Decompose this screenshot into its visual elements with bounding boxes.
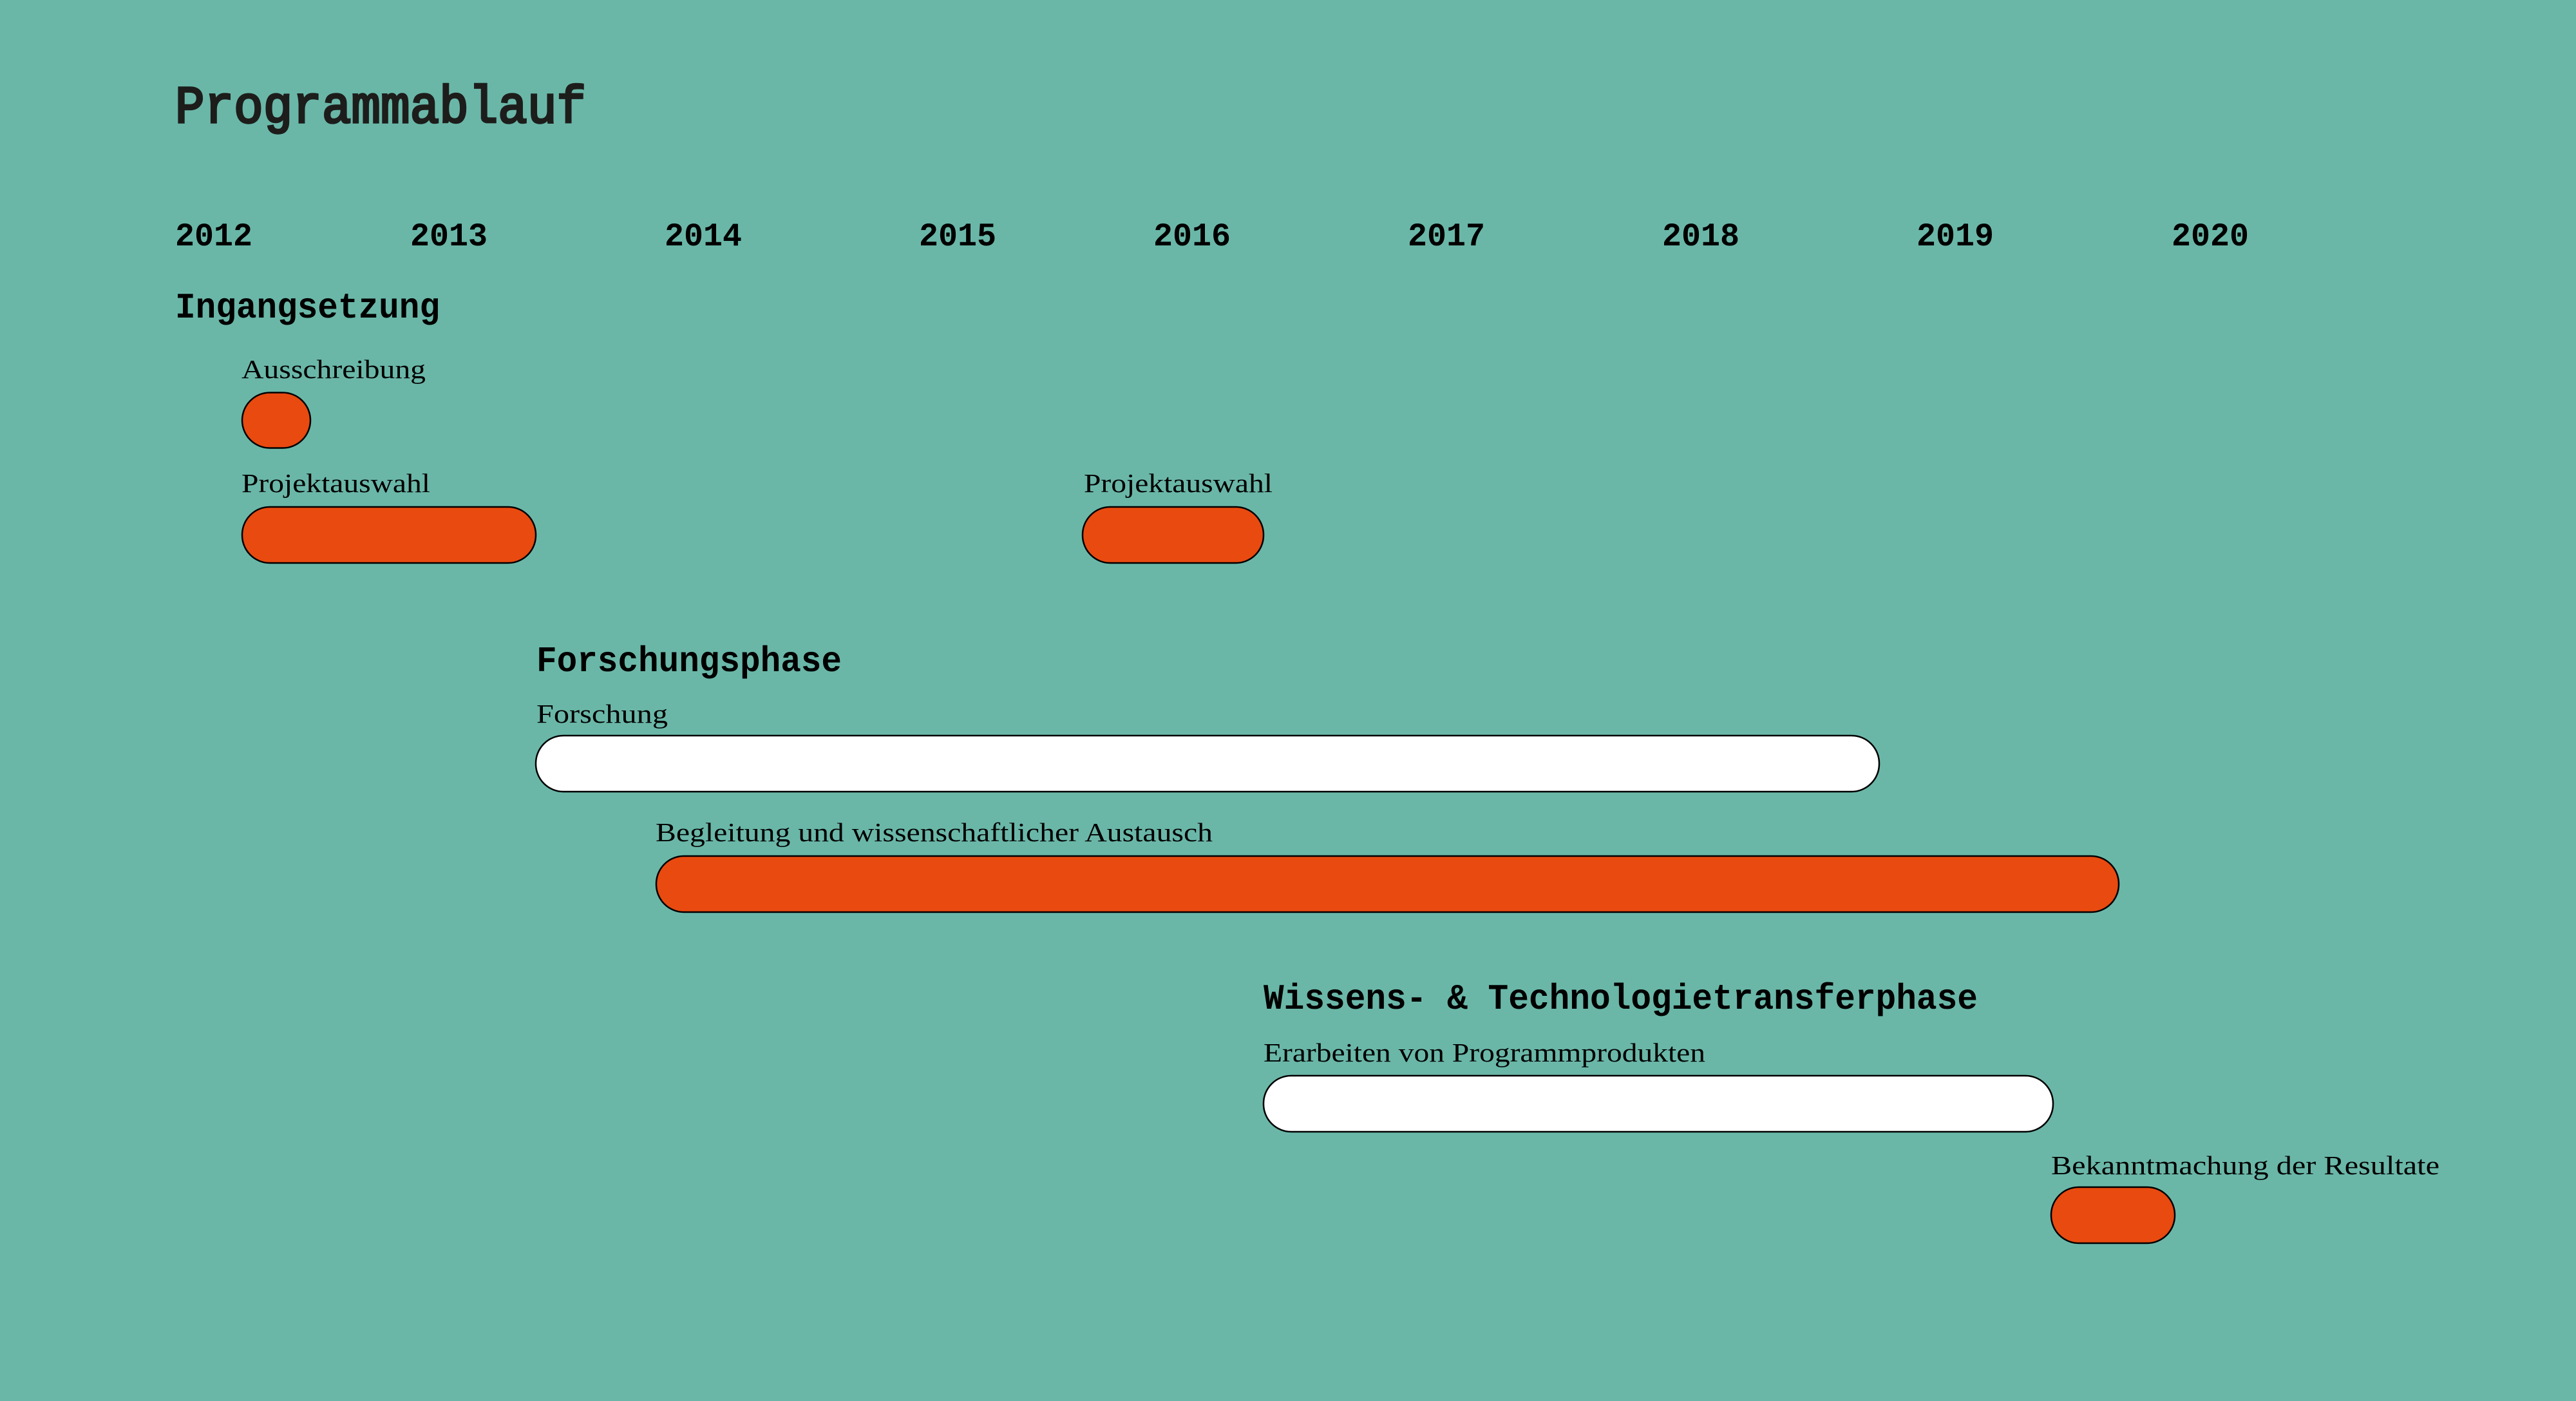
bar: Begleitung und wissenschaftlicher Austausch xyxy=(656,856,2119,912)
heading: Ingangsetzung: Ingangsetzung xyxy=(175,287,440,329)
heading: Wissens- & Technologietransferphase: Wissens- & Technologietransferphase xyxy=(1264,978,1978,1020)
year 2018: 2018 xyxy=(1662,219,1739,256)
bar: Ausschreibung xyxy=(242,393,310,448)
year 2016: 2016 xyxy=(1153,219,1231,256)
panel: Ingangsetzung phase xyxy=(175,287,1273,563)
label: Ausschreibung: Ausschreibung xyxy=(242,354,426,384)
year 2013: 2013 xyxy=(410,219,488,256)
bar: Erarbeiten von Programmprodukten xyxy=(1264,1076,2053,1132)
heading: Forschungsphase: Forschungsphase xyxy=(536,641,842,682)
bar: Bekanntmachung der Resultate xyxy=(2051,1187,2175,1243)
year 2015: 2015 xyxy=(919,219,996,256)
label: Forschung: Forschung xyxy=(536,699,668,729)
bar: Projektauswahl 2015 xyxy=(1083,507,1264,563)
panel: Wissens- und Technologietransferphase xyxy=(1264,978,2439,1243)
label: Projektauswahl 2015: Projektauswahl xyxy=(1084,468,1273,498)
year 2012: 2012 xyxy=(175,219,252,256)
title: Programmablauf xyxy=(175,79,586,138)
label: Erarbeiten von Programmprodukten: Erarbeiten von Programmprodukten xyxy=(1264,1038,1705,1067)
year 2017: 2017 xyxy=(1408,219,1485,256)
timeline years xyxy=(175,219,2249,256)
label: Begleitung und wissenschaftlicher Austausch: Begleitung und wissenschaftlicher Austausch xyxy=(656,817,1213,847)
year 2019: 2019 xyxy=(1917,219,1994,256)
year 2014: 2014 xyxy=(665,219,742,256)
bar: Projektauswahl 2012 xyxy=(242,507,536,563)
label: Bekanntmachung der Resultate: Bekanntmachung der Resultate xyxy=(2051,1150,2439,1180)
label: Projektauswahl 2012: Projektauswahl xyxy=(242,468,430,498)
year 2020: 2020 xyxy=(2172,219,2249,256)
bar: Forschung xyxy=(536,736,1879,792)
panel: Forschungsphase xyxy=(536,641,2119,912)
